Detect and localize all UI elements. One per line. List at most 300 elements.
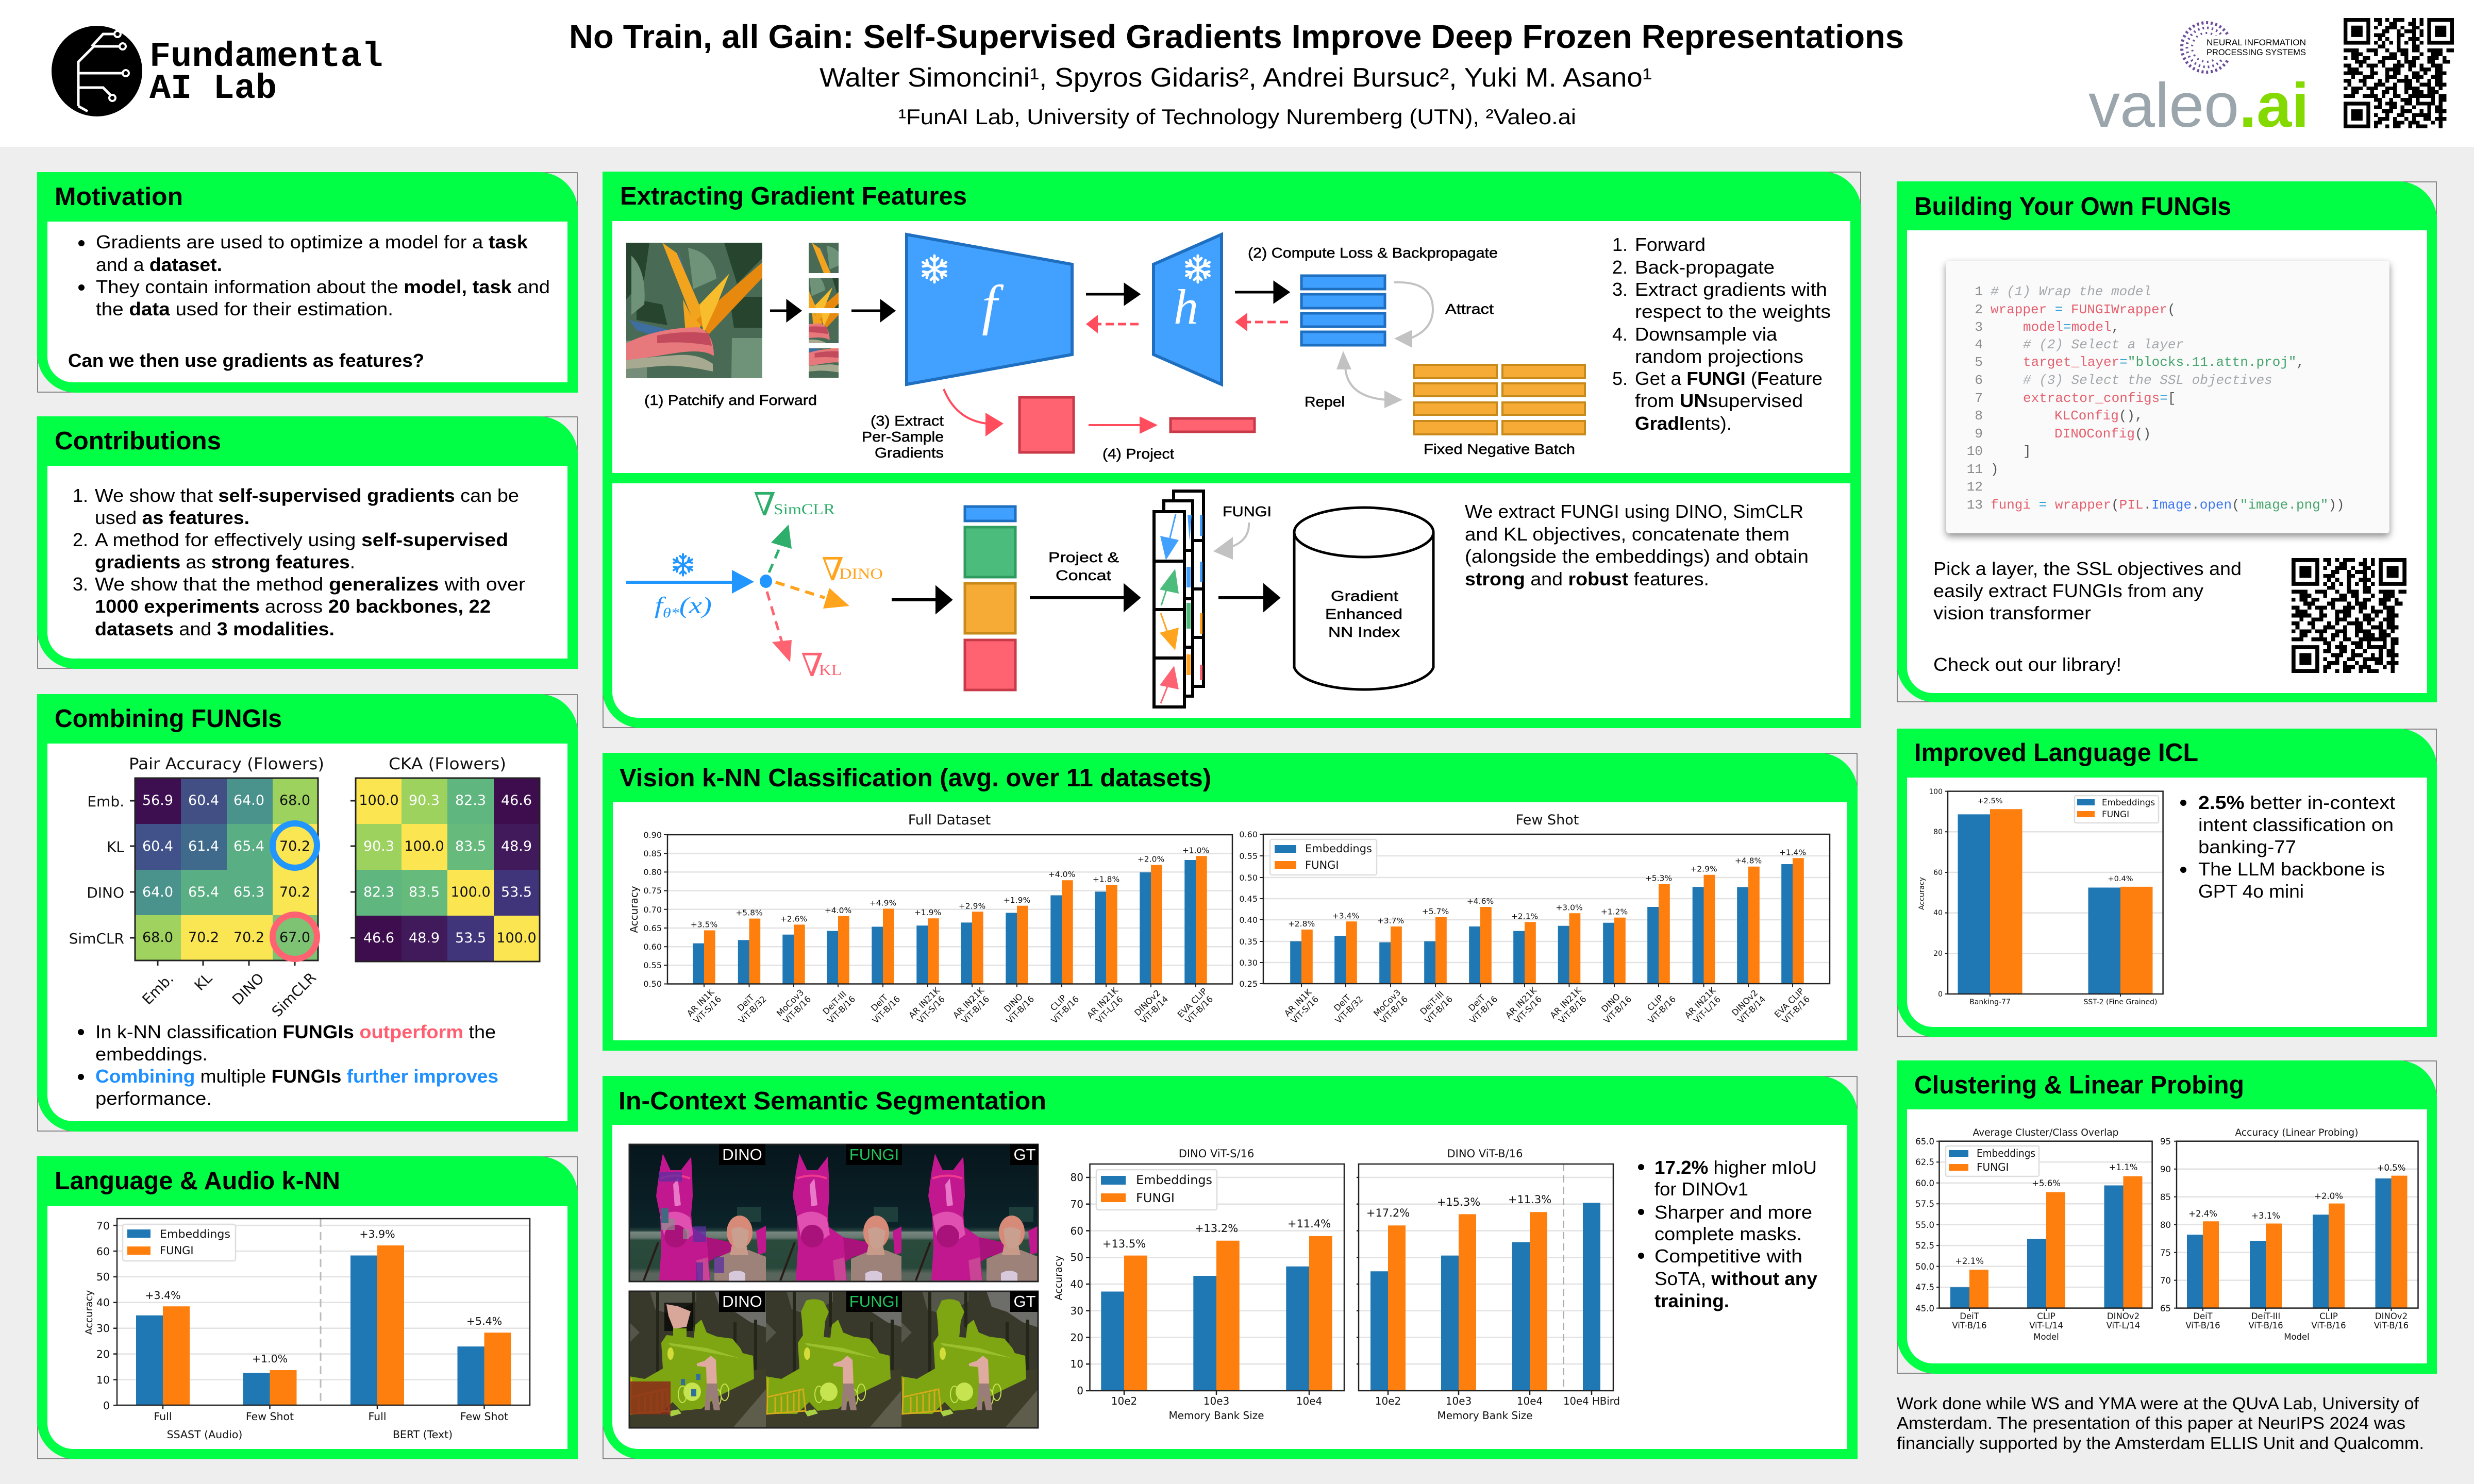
bar chart: cluster overlap: 65.0: [1915, 1137, 1934, 1146]
bar chart: ICL: +0.4%: [2108, 875, 2133, 883]
label: project and concat: [1048, 549, 1119, 583]
bar chart: Few Shot: +2.9%: [1690, 865, 1717, 874]
cylinder: gradient enhanced NN index: NN Index: [1328, 624, 1400, 640]
legend: [1096, 1170, 1217, 1210]
feature stack: [965, 507, 1015, 690]
bar chart: linear probing: ViT-B/16: [2374, 1321, 2409, 1330]
bar chart: cluster overlap: ViT-L/14: [2107, 1321, 2140, 1330]
bar chart: language and audio: 10: [96, 1374, 110, 1386]
bar chart: Full Dataset: ViT-B/16: [1005, 994, 1036, 1025]
arrow: repel: [1336, 351, 1402, 408]
bars: embeddings: [2187, 1178, 2392, 1308]
ICL bullets: banking-77: [2198, 836, 2296, 857]
steps list: GradIents).: [1635, 413, 1732, 434]
bar chart: ICL: [1918, 788, 2163, 1006]
bar chart: linear probing: 85: [2160, 1192, 2171, 1202]
bar chart: linear probing: 70: [2160, 1276, 2171, 1286]
heatmap: CKA: 53.5: [501, 884, 532, 900]
bar chart: Few Shot: ViT-B/16: [1602, 994, 1633, 1025]
combining bullets: Combining multiple FUNGIs further improves: [95, 1066, 498, 1087]
bar chart: ICL: 60: [1933, 869, 1943, 877]
heatmap: CKA: [350, 755, 540, 962]
code card: 10: [1967, 444, 1983, 459]
heatmap: CKA: 83.5: [409, 884, 440, 900]
bar chart: Few Shot: +5.3%: [1645, 874, 1672, 883]
bar chart: Full Dataset: DINO: [1002, 991, 1025, 1014]
heatmap: CKA: 100.0: [404, 838, 444, 854]
legend: Embeddings: [160, 1228, 230, 1240]
bar chart: Few Shot: ViT-B/16: [1780, 994, 1812, 1025]
contributions list: 2.: [73, 529, 88, 550]
arrow: project: [1030, 586, 1139, 609]
footer acknowledgement: Amsterdam. The presentation of this paper at NeurIPS 2024 was: [1897, 1413, 2405, 1432]
combining bullets: [78, 1021, 498, 1109]
bar chart: Full Dataset: 0.80: [643, 867, 662, 877]
bar chart: Few Shot: DINO: [1599, 991, 1622, 1014]
heading: In-Context Semantic Segmentation: In-Context Semantic Segmentation: [618, 1087, 1046, 1115]
label: FUNGI: FUNGI: [1223, 503, 1272, 519]
heatmap: Pair Accuracy: Emb.: [87, 793, 124, 810]
bar chart: DINO ViT-B/16: Memory Bank Size: [1437, 1409, 1533, 1422]
bar chart: Full Dataset: +1.9%: [914, 908, 941, 917]
bar chart: Full Dataset: 0.90: [643, 830, 662, 840]
legend: FUNGI: [1305, 859, 1339, 871]
bar chart: Few Shot: ViT-S/16: [1289, 994, 1320, 1025]
bar chart: linear probing: Accuracy (Linear Probing): [2235, 1127, 2359, 1138]
panel: Contributions: [37, 416, 578, 669]
heatmap: Pair Accuracy: Pair Accuracy (Flowers): [129, 755, 324, 773]
bar chart: Few Shot: 0.55: [1239, 851, 1258, 861]
code card: 2: [1975, 302, 1983, 317]
steps list: Get a FUNGI (Feature: [1635, 368, 1823, 389]
label: project: (4) Project: [1102, 446, 1174, 462]
bars: embeddings: [1290, 864, 1793, 984]
heatmap: Pair Accuracy: [69, 755, 324, 1020]
bar chart: ICL: 0: [1938, 990, 1943, 999]
steps list: Downsample via: [1635, 324, 1778, 345]
bar chart: linear probing: DINOv2: [2375, 1311, 2408, 1321]
input arrow with frozen model: [626, 554, 772, 620]
code card: # (1) Wrap the model: [1991, 284, 2151, 299]
bar chart: Full Dataset: 0.65: [643, 923, 662, 933]
steps list: from UNsupervised: [1635, 390, 1803, 411]
bar chart: cluster overlap: +1.1%: [2109, 1162, 2137, 1172]
steps list: respect to the weights: [1635, 301, 1831, 322]
bar chart: DINO ViT-S/16: 10: [1071, 1358, 1083, 1370]
image strip: horse segmentation: FUNGI: [849, 1145, 899, 1163]
heatmap: Pair Accuracy: 60.4: [188, 792, 219, 808]
label: fixed negative batch: Fixed Negative Batch: [1424, 441, 1575, 457]
bar chart: DINO ViT-S/16: 10e2: [1111, 1395, 1137, 1407]
arrow: to stacked features: [892, 588, 950, 611]
bar chart: linear probing: 75: [2160, 1248, 2171, 1258]
bars: embeddings: [1950, 1185, 2124, 1308]
FUNGI description: [1465, 501, 1809, 589]
image strip: train segmentation: FUNGI: [849, 1292, 899, 1310]
bar chart: Full Dataset: ViT-B/16: [960, 994, 991, 1025]
arrow: DINO gradient: [776, 550, 883, 609]
cylinder: gradient enhanced NN index: Enhanced: [1325, 606, 1402, 622]
bar chart: Few Shot: 0.50: [1239, 873, 1258, 883]
affiliations: ¹FunAI Lab, University of Technology Nuremberg (UTN), ²Valeo.ai: [898, 105, 1576, 129]
image strip: horse segmentation: GT: [1013, 1145, 1036, 1163]
bar chart: linear probing: +3.1%: [2251, 1211, 2280, 1221]
bar chart: linear probing: 65: [2160, 1304, 2171, 1313]
bar chart: language and audio: 50: [96, 1271, 110, 1283]
bar chart: Full Dataset: +4.9%: [870, 898, 896, 907]
bar chart: DINO ViT-S/16: [1053, 1148, 1344, 1422]
bar chart: DINO ViT-S/16: 50: [1071, 1251, 1083, 1263]
bar chart: DINO ViT-S/16: 40: [1071, 1278, 1083, 1290]
heatmap: Pair Accuracy: 56.9: [142, 792, 173, 808]
bar chart: Few Shot: 0.60: [1239, 830, 1258, 839]
motivation bullets: They contain information about the model, task and: [96, 276, 550, 297]
motivation bullets: and a dataset.: [96, 254, 222, 275]
label: project and concat: Concat: [1056, 567, 1111, 583]
arrow: KL gradient: ∇: [801, 646, 823, 684]
panel: Combining FUNGIs: [37, 694, 578, 1132]
heatmap: Pair Accuracy: SimCLR: [269, 969, 320, 1020]
heading: Language & Audio k-NN: Language & Audio k-NN: [55, 1167, 340, 1195]
image strip: train segmentation: [629, 1291, 1038, 1428]
label: extract per-sample: Per-Sample: [862, 429, 944, 445]
bar chart: Full Dataset: 0.50: [643, 979, 662, 989]
bar chart: Few Shot: ViT-B/16: [1423, 994, 1455, 1025]
bar chart: Few Shot: ViT-S/16: [1512, 994, 1544, 1025]
code card: wrapper = FUNGIWrapper(: [1991, 302, 2176, 317]
bar chart: language and audio: Full: [154, 1410, 172, 1423]
bar chart: Full Dataset: ViT-B/16: [1183, 994, 1215, 1025]
steps list: 2.: [1612, 257, 1628, 278]
bar chart: Few Shot: +3.4%: [1332, 911, 1359, 920]
cylinder: gradient enhanced NN index: [1294, 508, 1433, 689]
bar chart: Few Shot: 0.30: [1239, 958, 1258, 968]
logo: NeurIPS: [2182, 23, 2310, 72]
bars: embeddings: [693, 860, 1196, 984]
bar chart: DINO ViT-B/16: DINO ViT-B/16: [1447, 1148, 1523, 1160]
contributions list: [73, 485, 525, 639]
bar chart: language and audio: 60: [96, 1245, 110, 1258]
bar chart: language and audio: 40: [96, 1296, 110, 1309]
label: attract: Attract: [1445, 301, 1494, 317]
heatmap: CKA: 90.3: [363, 838, 394, 854]
legend: [2075, 796, 2159, 823]
bar chart: Full Dataset: +3.5%: [691, 920, 717, 930]
bar chart: DINO ViT-S/16: +13.2%: [1195, 1222, 1238, 1235]
bars: FUNGI: [1301, 858, 1804, 984]
bar chart: Few Shot: +5.7%: [1422, 907, 1449, 916]
heading: Combining FUNGIs: Combining FUNGIs: [55, 705, 282, 733]
bar chart: linear probing: ViT-B/16: [2185, 1321, 2220, 1330]
bar chart: linear probing: +0.5%: [2377, 1163, 2405, 1173]
combining bullets: In k-NN classification FUNGIs outperform the: [95, 1021, 496, 1042]
panel: Language & Audio k-NN: [37, 1156, 578, 1459]
head h: h: [1174, 279, 1198, 334]
bar chart: cluster overlap: DINOv2: [2107, 1311, 2139, 1321]
bar chart: language and audio: SSAST (Audio): [167, 1428, 242, 1441]
bar chart: Full Dataset: AR IN21K: [907, 985, 942, 1020]
arrow: patches to encoder: [851, 301, 894, 320]
bar chart: Full Dataset: ViT-B/16: [826, 994, 857, 1025]
bar chart: language and audio: [83, 1219, 530, 1441]
bar chart: Few Shot: 0.40: [1239, 915, 1258, 925]
bar chart: cluster overlap: 45.0: [1915, 1304, 1934, 1313]
heatmap: Pair Accuracy: SimCLR: [69, 930, 124, 947]
heatmap: CKA: 48.9: [409, 930, 440, 946]
bar chart: cluster overlap: 57.5: [1915, 1199, 1934, 1209]
bars: FUNGI: [1388, 1212, 1547, 1391]
heatmap: CKA: 83.5: [455, 838, 486, 854]
bar chart: DINO ViT-S/16: +13.5%: [1102, 1238, 1146, 1250]
image strip: horse segmentation: [629, 1144, 1038, 1281]
bar chart: Full Dataset: +2.6%: [780, 914, 807, 923]
bar chart: language and audio: Accuracy: [83, 1290, 95, 1335]
bar chart: DINO ViT-S/16: +11.4%: [1288, 1218, 1331, 1230]
code card: 7: [1975, 391, 1983, 406]
bar chart: Few Shot: ViT-B/16: [1557, 994, 1589, 1025]
arrow: DINO gradient: ∇: [822, 550, 844, 588]
label: extract per-sample: (3) Extract: [871, 413, 944, 429]
legend: Embeddings: [1136, 1173, 1212, 1187]
bar chart: Few Shot: AR IN21K: [1503, 985, 1539, 1020]
bar chart: Full Dataset: ViT-B/16: [1049, 994, 1081, 1025]
code card: 8: [1975, 408, 1983, 424]
heatmap: Pair Accuracy: 64.0: [142, 884, 173, 900]
combining bullets: performance.: [95, 1088, 212, 1109]
heatmap: CKA: 82.3: [363, 884, 394, 900]
bars: FUNGI: [1990, 809, 2152, 994]
steps list: 1.: [1612, 234, 1628, 255]
steps list: [1612, 234, 1831, 434]
head h: [1154, 234, 1222, 384]
steps list: Forward: [1635, 234, 1706, 255]
bar chart: Few Shot: MoCov3: [1372, 987, 1402, 1018]
bar chart: linear probing: +2.4%: [2188, 1209, 2217, 1219]
bar chart: DINO ViT-S/16: 20: [1071, 1331, 1083, 1344]
bar chart: Few Shot: +4.6%: [1467, 897, 1494, 906]
panel: Clustering & Linear Probing: [1897, 1060, 2437, 1374]
heatmap: CKA: 100.0: [496, 930, 537, 946]
bar chart: Full Dataset: +4.0%: [1048, 870, 1075, 879]
bar chart: Full Dataset: 0.75: [643, 886, 662, 896]
bar chart: Few Shot: 0.45: [1239, 894, 1258, 904]
heading: Clustering & Linear Probing: Clustering & Linear Probing: [1914, 1071, 2244, 1099]
bar chart: linear probing: 90: [2160, 1165, 2171, 1174]
bar chart: cluster overlap: 55.0: [1915, 1220, 1934, 1230]
bar chart: Full Dataset: AR IN21K: [951, 985, 987, 1020]
bar chart: Few Shot: 0.35: [1239, 937, 1258, 947]
code card: 6: [1975, 373, 1983, 388]
cylinder: gradient enhanced NN index: Gradient: [1331, 588, 1398, 604]
bar chart: language and audio: 30: [96, 1322, 110, 1335]
segmentation bullets: SoTA, without any: [1654, 1268, 1817, 1289]
highlight: red circle: [273, 915, 317, 959]
bar chart: DINO ViT-B/16: +17.2%: [1366, 1207, 1410, 1219]
FUNGI strips: [1154, 491, 1203, 707]
panel: Motivation: [37, 172, 578, 393]
heatmap: Pair Accuracy: 65.3: [233, 884, 264, 900]
segmentation bullets: complete masks.: [1654, 1223, 1802, 1244]
heading: Vision k-NN: Vision k-NN Classification (avg. over 11 datasets): [620, 764, 1211, 792]
label: extract per-sample: Gradients: [875, 445, 944, 461]
heading: Building Your Own FUNGIs: Building Your Own FUNGIs: [1914, 193, 2231, 221]
bar chart: Few Shot: AR IN1K: [1282, 987, 1314, 1019]
code card: ]: [2023, 444, 2031, 459]
bar chart: ICL: SST-2 (Fine Grained): [2083, 998, 2158, 1006]
legend: FUNGI: [1977, 1161, 2009, 1173]
arrow: to index: [1218, 586, 1278, 609]
bar chart: Full Dataset: EVA CLIP: [1176, 986, 1209, 1020]
bar chart: Few Shot: +1.4%: [1779, 848, 1806, 857]
bar chart: Full Dataset: +1.9%: [1004, 896, 1030, 905]
code card: extractor_configs=[: [2023, 391, 2176, 406]
bar chart: DINO ViT-S/16: 10e4: [1296, 1395, 1322, 1407]
logo: Fundamental AI Lab: AI Lab: [149, 69, 277, 109]
ICL bullets: 2.5% better in-context: [2198, 792, 2395, 813]
bars: FUNGI: [1969, 1176, 2142, 1308]
heatmap: Pair Accuracy: 61.4: [188, 838, 219, 854]
encoder f: [907, 234, 1072, 384]
code card: KLConfig(),: [2054, 408, 2143, 424]
steps list: 3.: [1612, 279, 1628, 300]
heatmap: Pair Accuracy: 68.0: [142, 930, 173, 946]
bar chart: DINO ViT-B/16: 10e4: [1517, 1395, 1543, 1407]
bar chart: Full Dataset: ViT-L/16: [1094, 994, 1125, 1025]
contributions list: 1000 experiments across 20 backbones, 22: [95, 596, 491, 617]
panel: Building Your Own FUNGIs: [1897, 181, 2437, 702]
heatmap: Pair Accuracy: DINO: [87, 884, 124, 901]
bar chart: Few Shot: ViT-B/14: [1736, 994, 1767, 1025]
bar chart: cluster overlap: +2.1%: [1955, 1256, 1984, 1266]
bar chart: language and audio: +3.9%: [359, 1228, 395, 1240]
code card: ): [1991, 462, 1999, 477]
logo: NeurIPS: NEURAL INFORMATION: [2206, 38, 2306, 47]
legend: FUNGI: [2102, 810, 2129, 820]
arrow: DINO gradient: DINO: [839, 565, 883, 582]
bar chart: DINO ViT-S/16: 80: [1071, 1171, 1083, 1184]
bar chart: language and audio: Full: [368, 1410, 387, 1423]
bar chart: ICL: 20: [1933, 950, 1943, 958]
logo: Fundamental AI Lab: [52, 26, 383, 116]
arrows: forward and backward: [1086, 283, 1288, 333]
bar chart: Few Shot: ViT-B/16: [1378, 994, 1410, 1025]
heatmap: Pair Accuracy: DINO: [229, 970, 268, 1008]
heatmap: Pair Accuracy: 68.0: [279, 792, 310, 808]
arrow: project: [1089, 416, 1158, 434]
heatmap: CKA: 53.5: [455, 930, 486, 946]
bar chart: DINO ViT-B/16: [1357, 1148, 1620, 1422]
bar chart: Full Dataset: DINOv2: [1132, 988, 1162, 1018]
bar chart: ICL: Banking-77: [1969, 998, 2011, 1006]
legend: FUNGI: [1136, 1191, 1175, 1205]
heatmap: Pair Accuracy: 70.2: [188, 930, 219, 946]
heatmap: CKA: 100.0: [359, 792, 399, 808]
heatmap: Pair Accuracy: 64.0: [233, 792, 264, 808]
bar chart: Full Dataset: AR IN21K: [1085, 985, 1121, 1020]
bar chart: linear probing: DeiT: [2193, 1311, 2213, 1321]
QR code: library: [2292, 558, 2406, 673]
bar chart: cluster overlap: DeiT: [1960, 1311, 1980, 1321]
label: patchify: (1) Patchify and Forward: [644, 392, 817, 408]
bar chart: linear probing: CLIP: [2319, 1311, 2338, 1321]
bar chart: cluster overlap: 47.5: [1915, 1283, 1934, 1292]
segmentation bullets: training.: [1654, 1290, 1729, 1311]
contributions list: datasets and 3 modalities.: [95, 618, 335, 639]
steps list: Back-propagate: [1635, 257, 1775, 278]
library description: easily extract FUNGIs from any: [1933, 580, 2203, 601]
bar chart: language and audio: +3.4%: [145, 1289, 181, 1302]
library description: Check out our library!: [1933, 654, 2121, 675]
input arrow with frozen model: f: [655, 592, 661, 618]
library description: Pick a layer, the SSL objectives and: [1933, 558, 2242, 579]
contributions list: 3.: [73, 574, 88, 595]
heatmap: Pair Accuracy: 67.0: [279, 930, 310, 946]
bar chart: ICL: 80: [1933, 828, 1943, 836]
bar chart: Full Dataset: +1.8%: [1093, 875, 1119, 884]
arrow: SimCLR gradient: ∇: [754, 485, 776, 523]
bar chart: DINO ViT-S/16: Memory Bank Size: [1169, 1409, 1264, 1422]
bar chart: language and audio: 70: [96, 1220, 110, 1232]
code card: # (3) Select the SSL objectives: [2023, 373, 2272, 388]
bar chart: cluster overlap: 62.5: [1915, 1157, 1934, 1167]
code card: 1: [1975, 284, 1983, 299]
bar chart: cluster overlap: [1915, 1127, 2152, 1342]
bar chart: Few Shot: ViT-B/16: [1646, 994, 1678, 1025]
bar chart: language and audio: BERT (Text): [393, 1428, 453, 1441]
bar chart: Full Dataset: [628, 812, 1232, 1027]
segmentation bullets: [1638, 1157, 1817, 1311]
segmentation bullets: Competitive with: [1654, 1245, 1802, 1267]
bar chart: linear probing: ViT-B/16: [2248, 1321, 2283, 1330]
arrow: KL gradient: KL: [819, 662, 842, 679]
bar chart: DINO ViT-B/16: 10e3: [1446, 1395, 1472, 1407]
bars: FUNGI: [1124, 1236, 1332, 1391]
bar chart: linear probing: +2.0%: [2314, 1191, 2343, 1201]
bar chart: DINO ViT-S/16: 60: [1071, 1225, 1083, 1237]
footer acknowledgement: Work done while WS and YMA were at the QUvA Lab, University of: [1897, 1394, 2419, 1413]
bar chart: Few Shot: +2.1%: [1511, 912, 1538, 921]
legend: [1270, 839, 1377, 875]
contributions list: A method for effectively using self-supervised: [95, 529, 508, 550]
bar chart: Full Dataset: AR IN1K: [685, 987, 716, 1019]
bar chart: Full Dataset: ViT-S/16: [692, 994, 723, 1025]
footer acknowledgement: [1897, 1394, 2424, 1453]
bar chart: Full Dataset: 0.60: [643, 942, 662, 952]
image strip: train segmentation: DINO: [722, 1292, 762, 1310]
steps list: 4.: [1612, 324, 1628, 345]
heatmap: CKA: 100.0: [450, 884, 491, 900]
ICL bullets: The LLM backbone is: [2198, 858, 2385, 880]
bar chart: Few Shot: DINOv2: [1730, 988, 1760, 1018]
bar chart: Few Shot: DeiT: [1332, 992, 1353, 1013]
heading: Improved Language ICL: Improved Language ICL: [1914, 739, 2198, 767]
label: project and concat: Project &: [1048, 549, 1119, 565]
bar chart: Few Shot: +4.8%: [1735, 856, 1762, 866]
heatmap: CKA: 48.9: [501, 838, 532, 854]
bar chart: linear probing: 80: [2160, 1220, 2171, 1230]
bar chart: DINO ViT-B/16: 10e2: [1375, 1395, 1401, 1407]
image strip: train segmentation: GT: [1013, 1292, 1036, 1310]
bar chart: Few Shot: EVA CLIP: [1773, 986, 1806, 1020]
bar chart: cluster overlap: 50.0: [1915, 1262, 1934, 1272]
motivation bullets: the data used for their estimation.: [96, 298, 393, 319]
heatmap: Pair Accuracy: 70.2: [279, 838, 310, 854]
bar chart: Full Dataset: Accuracy: [628, 886, 640, 933]
bar chart: Full Dataset: DeiT: [735, 992, 756, 1013]
heatmap: CKA: 46.6: [501, 792, 532, 808]
code card: 9: [1975, 426, 1983, 442]
bar chart: Full Dataset: 0.70: [643, 905, 662, 915]
